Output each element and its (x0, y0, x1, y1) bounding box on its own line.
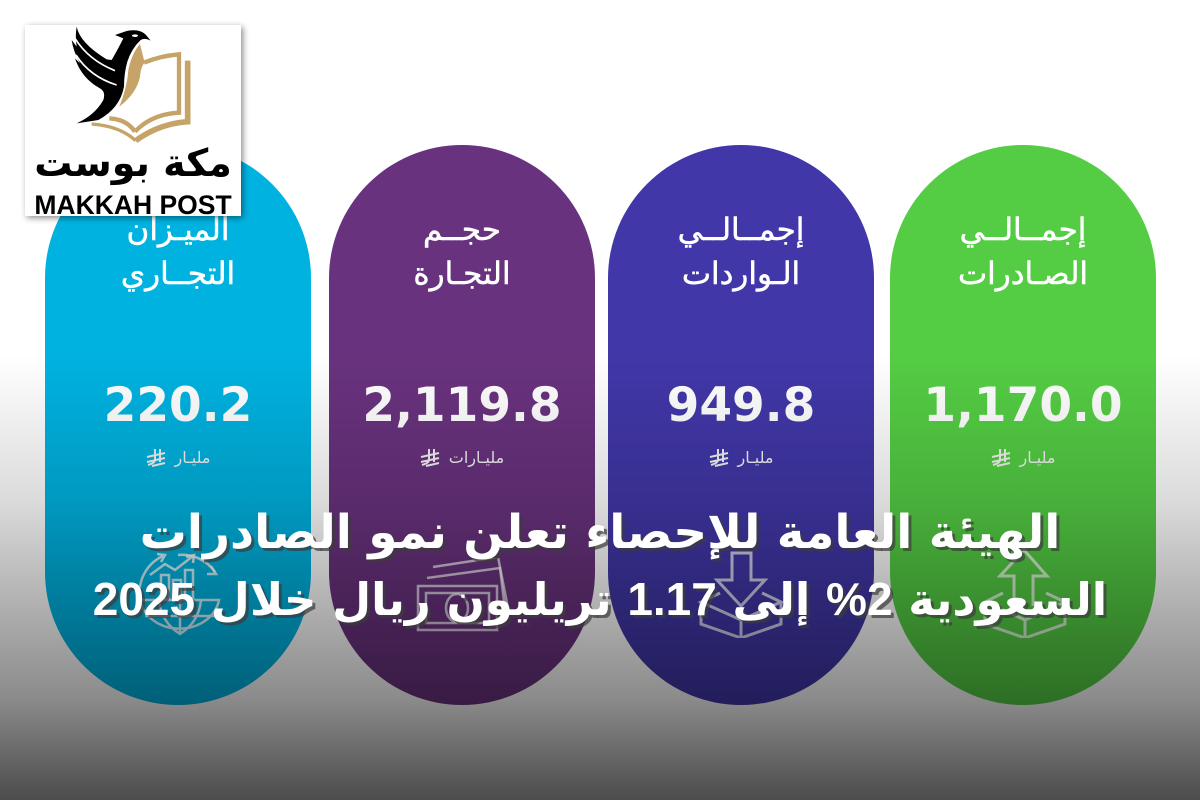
logo: Makkah Post (25, 25, 241, 216)
label: trade balance: التجــاري (121, 256, 235, 292)
value: trade balance: 220.2 (104, 378, 252, 433)
unit: billions riyal: مليـارات (449, 448, 504, 467)
label: total exports: الصـادرات (958, 256, 1088, 292)
panel: total exports (890, 145, 1156, 705)
value: total exports: 1,170.0 (923, 378, 1123, 433)
label: total imports: الـواردات (682, 256, 800, 292)
unit: billion riyal: مليـار (738, 448, 773, 467)
unit: billion riyal: مليـار (174, 448, 210, 467)
label: total exports (958, 212, 1088, 292)
panel: trade volume (329, 145, 595, 705)
icon: banknotes (416, 558, 509, 632)
label: trade volume (413, 212, 511, 292)
panel: trade balance (45, 145, 311, 705)
unit: billion riyal (992, 448, 1055, 467)
label: trade volume: التجـارة (413, 256, 511, 292)
label: trade balance (121, 212, 235, 292)
label: total exports: إجمــالــي (960, 212, 1086, 248)
icon: globe with growth chart (138, 552, 220, 636)
headline line 1: الهيئة العامة للإحصاء تعلن نمو الصادرات (140, 505, 1060, 560)
logo wordmark arabic: مكة بوست (34, 141, 232, 185)
unit: billion riyal (710, 448, 773, 467)
icon: falcon and open book (72, 26, 190, 143)
icon: box with up arrow (982, 548, 1066, 638)
value: trade volume: 2,119.8 (362, 378, 562, 433)
label: trade balance: الميـزان (127, 212, 229, 248)
unit: billion riyal: مليـار (1020, 448, 1055, 467)
label: total imports: إجمــالــي (678, 212, 804, 248)
value: total imports: 949.8 (667, 378, 815, 433)
headline line 2: السعودية 2% إلى 1.17 تريليون ريال خلال 2025 (93, 573, 1107, 626)
panel: total imports (608, 145, 874, 705)
icon: box with down arrow (698, 552, 784, 638)
unit: billion riyal (146, 448, 210, 467)
label: total imports (678, 212, 804, 292)
unit: billions riyal (420, 448, 504, 467)
label: trade volume: حجــم (423, 212, 501, 248)
